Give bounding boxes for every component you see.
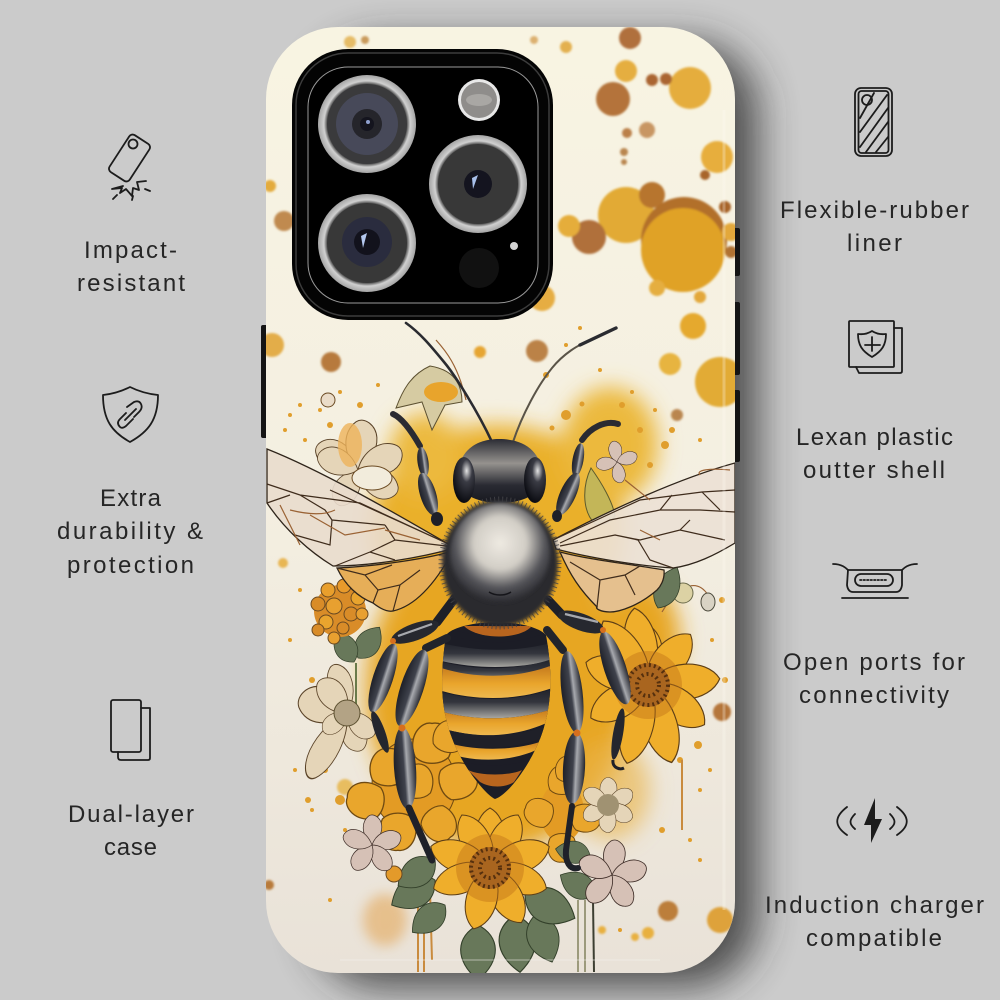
label: compatible — [806, 925, 942, 952]
icon: shield on layered card — [849, 321, 902, 373]
bee middle and hind legs — [362, 598, 637, 868]
flash — [458, 79, 500, 121]
label: liner — [847, 230, 902, 257]
label: Open ports for — [783, 649, 965, 676]
flower: small drooping right — [653, 568, 716, 612]
bee front legs — [393, 414, 618, 526]
case edge highlights — [417, 140, 726, 961]
label: Induction charger — [765, 892, 984, 919]
label: case — [104, 834, 157, 861]
feature: dual-layer — [68, 700, 194, 861]
feature: impact-resistant — [77, 133, 185, 297]
label: Lexan plastic — [796, 424, 953, 451]
label: resistant — [77, 270, 185, 297]
blotch lower left — [363, 894, 407, 946]
microphone — [510, 242, 518, 250]
label: outter shell — [803, 457, 945, 484]
icon: lightning bolt with waves — [837, 798, 907, 843]
flower: upper right sprig — [585, 440, 639, 525]
lidar — [459, 248, 499, 288]
label: Flexible-rubber — [780, 197, 969, 224]
side buttons — [261, 228, 740, 462]
feature: lexan shell — [796, 321, 953, 484]
paint splatter on the case — [260, 27, 745, 941]
label: Impact- — [84, 237, 177, 264]
icon: shield with chain link — [103, 387, 158, 442]
flower: upper left cream — [315, 392, 403, 506]
flower: right sunflower — [580, 605, 721, 767]
phone drop shadow — [312, 42, 758, 987]
flower: bottom sunflower — [426, 808, 554, 933]
phone case — [260, 27, 745, 980]
camera module — [292, 49, 553, 320]
yellow watercolor wash — [366, 387, 680, 850]
label: durability & — [57, 518, 203, 545]
flower: left beige — [298, 664, 376, 780]
flower: top small drooping — [396, 340, 466, 430]
bee antennae — [406, 323, 616, 442]
label: connectivity — [799, 682, 949, 709]
icon: charging port — [833, 564, 917, 598]
flower: left marigold — [344, 717, 482, 850]
lens: top left — [318, 75, 416, 173]
feature: flexible rubber liner — [780, 88, 969, 257]
flowers: pink blossoms — [341, 815, 649, 911]
feature: open ports — [783, 564, 965, 709]
flower: right marigold and daisy — [521, 756, 636, 862]
fine speckles — [283, 326, 728, 932]
bee abdomen — [442, 622, 550, 799]
label: protection — [67, 552, 194, 579]
lens: bottom left — [318, 194, 416, 292]
drips — [418, 760, 682, 972]
icon: dropped phone — [107, 133, 152, 200]
label: Extra — [100, 485, 162, 512]
label: Dual-layer — [68, 801, 194, 828]
bee head — [453, 439, 546, 503]
feature: durability — [57, 387, 203, 579]
left wing — [267, 449, 455, 611]
bee thorax — [441, 499, 559, 627]
feature: induction charging — [765, 798, 984, 952]
flower: left orange cluster — [310, 578, 382, 704]
icon: two stacked cards — [111, 700, 150, 760]
icon: striped phone liner — [855, 88, 892, 156]
lens: right — [429, 135, 527, 233]
right wing — [553, 463, 735, 612]
leaves: bottom — [386, 840, 592, 973]
